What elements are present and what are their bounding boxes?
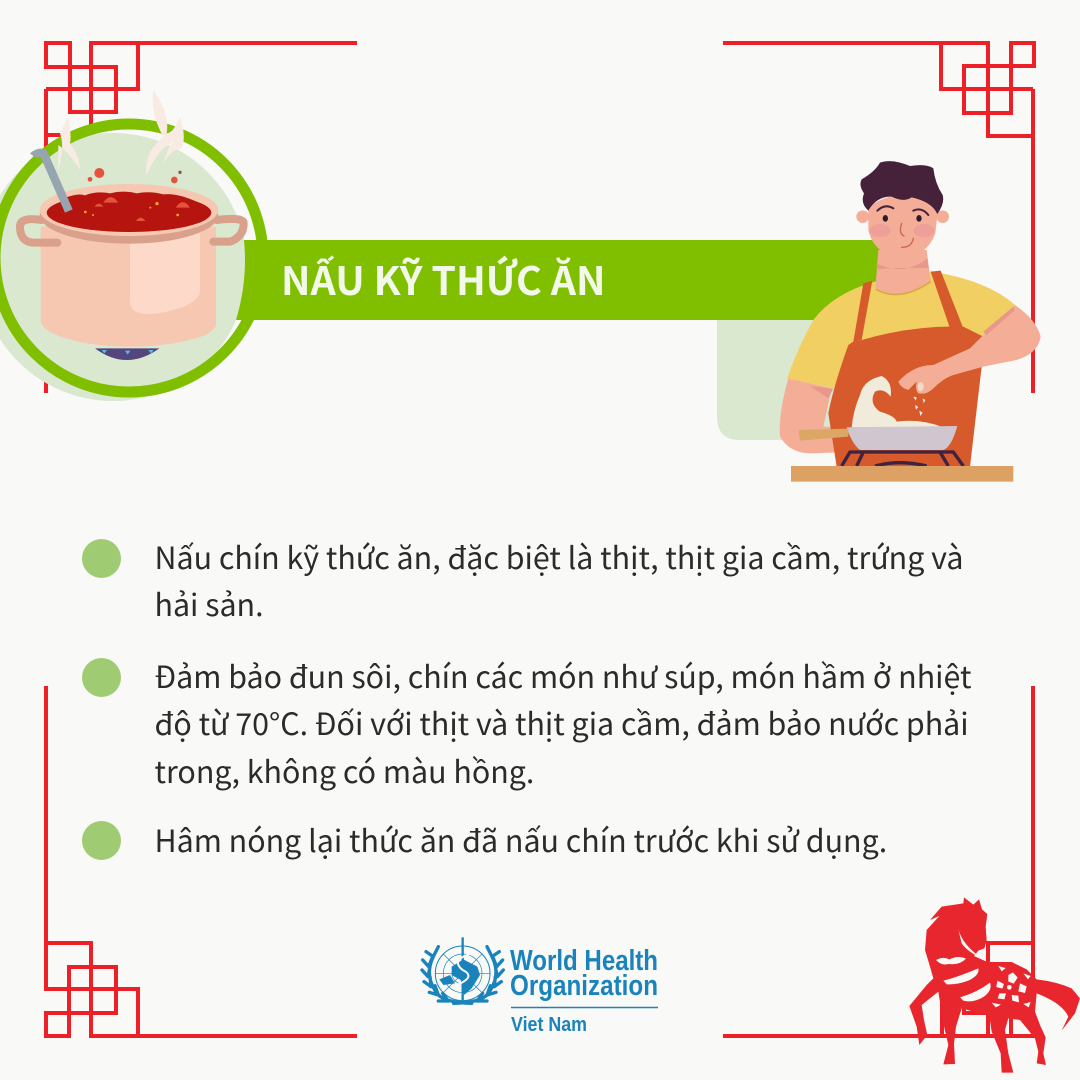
bullet three xyxy=(82,821,121,860)
icon: cooking pot xyxy=(20,90,244,360)
green ring xyxy=(0,124,263,392)
icon: WHO emblem xyxy=(422,937,503,1003)
WHO logo xyxy=(422,937,658,1036)
WHO logo: Organization xyxy=(510,970,658,1002)
text: hải sản. xyxy=(154,581,264,625)
icon: cook at stove xyxy=(780,161,1041,482)
bullet two text xyxy=(154,653,971,792)
bullet one text xyxy=(154,534,963,625)
title: NẤU KỸ THỨC ĂN xyxy=(281,250,606,307)
light green circle behind pot xyxy=(0,133,247,401)
light green panel behind cook xyxy=(717,320,840,440)
green title banner xyxy=(236,240,885,320)
bullet three text: Hâm nóng lại thức ăn đã nấu chín trước khi sử dụng. xyxy=(154,817,887,861)
WHO logo: Viet Nam xyxy=(511,1014,587,1036)
icon: paper-cut horse xyxy=(909,897,1080,1073)
text: độ từ 70°C. Đối với thịt và thịt gia cầm, đảm bảo nước phải xyxy=(154,700,969,744)
WHO logo: World Health xyxy=(510,945,658,977)
text: Nấu chín kỹ thức ăn, đặc biệt là thịt, thịt gia cầm, trứng và xyxy=(154,534,963,578)
bullet one xyxy=(82,539,121,578)
text: trong, không có màu hồng. xyxy=(154,748,534,792)
bullet two xyxy=(82,658,121,697)
text: Đảm bảo đun sôi, chín các món như súp, món hầm ở nhiệt xyxy=(154,653,971,697)
